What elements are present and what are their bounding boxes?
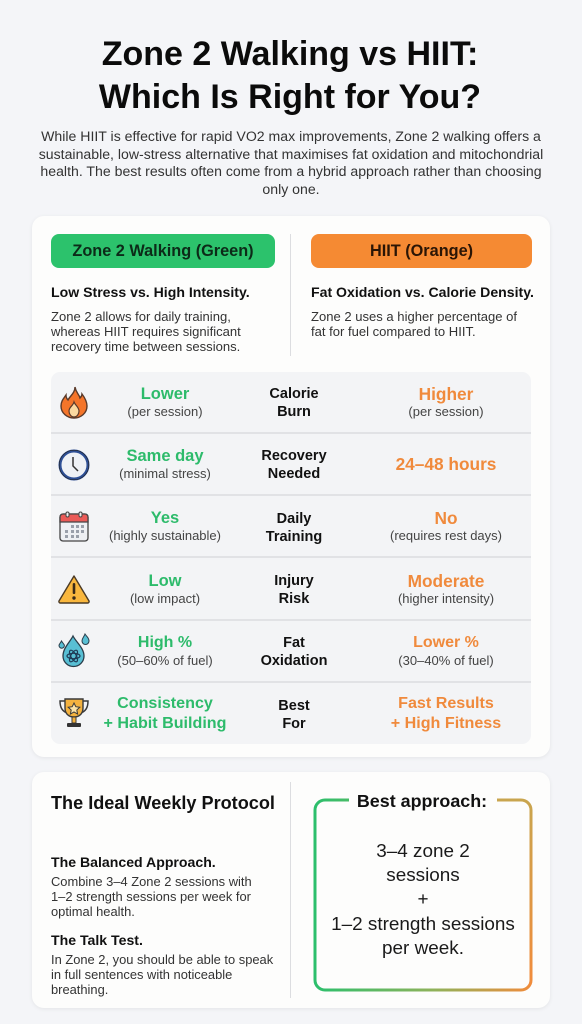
orange value: No (434, 508, 458, 528)
metric: Burn (277, 404, 311, 420)
orange value: + High Fitness (391, 714, 501, 732)
green note: (minimal stress) (119, 466, 211, 481)
icon: clock (58, 450, 90, 480)
green value: + Habit Building (104, 714, 226, 732)
orange value: Lower % (413, 634, 479, 651)
intro text: sustainable, low-stress alternative that maximises fat oxidation and mitochondrial (39, 146, 543, 162)
intro text: health. The best results often come from a hybrid approach rather than choosing (40, 163, 542, 179)
icon: flame (60, 386, 88, 419)
green note: (per session) (127, 404, 203, 419)
text: balanced approach: optimal health. (51, 904, 135, 919)
title (98, 35, 481, 116)
text: talk test: in full sentences with noticeable (51, 967, 232, 982)
orange note: (requires rest days) (390, 528, 502, 543)
metric: Training (266, 529, 322, 545)
orange value: Fast Results (398, 694, 494, 712)
row: injury risk (130, 571, 494, 607)
comparison table background (51, 372, 531, 744)
orange value (391, 694, 501, 732)
orange note: (per session) (408, 404, 484, 419)
orange value: Moderate (408, 571, 484, 591)
green note: (highly sustainable) (109, 528, 221, 543)
metric: Calorie (269, 386, 319, 402)
metric: Oxidation (261, 653, 327, 669)
icon: trophy (59, 698, 89, 727)
callout text: per week. (382, 938, 464, 959)
green value (104, 694, 226, 732)
icon: calendar (59, 512, 89, 542)
text: low stress: Zone 2 allows for daily training, (51, 309, 231, 324)
intro text (39, 128, 543, 197)
callout text: sessions (386, 865, 460, 886)
orange note: (higher intensity) (398, 591, 494, 606)
metric (278, 698, 310, 732)
text: low stress: recovery time between sessions. (51, 339, 240, 354)
divider (290, 782, 291, 998)
metric: Fat (283, 635, 305, 651)
callout text: 1–2 strength sessions (331, 914, 515, 935)
text: low stress (51, 309, 241, 354)
badge: Zone 2 Walking (51, 234, 275, 268)
metric: For (282, 716, 306, 732)
panel: weekly protocol (32, 772, 550, 1008)
metric (266, 511, 322, 545)
green note: (low impact) (130, 591, 200, 606)
text: fat oxidation (311, 309, 517, 339)
callout frame: best approach (314, 798, 532, 992)
green value: Lower (141, 385, 189, 403)
panel: comparison (32, 216, 550, 757)
green value: Yes (151, 509, 179, 527)
text: talk test: In Zone 2, you should be able to speak (51, 952, 273, 967)
badge: HIIT (311, 234, 532, 268)
text: low stress: whereas HIIT requires significant (51, 324, 241, 339)
heading: fat oxidation: Fat Oxidation vs. Calorie Density. (311, 284, 534, 300)
metric: Needed (268, 466, 320, 482)
orange note: (30–40% of fuel) (398, 653, 494, 668)
green note: (50–60% of fuel) (117, 653, 213, 668)
metric (269, 386, 319, 420)
text: balanced approach: 1–2 strength sessions per week for (51, 889, 251, 904)
green value: High % (138, 634, 192, 651)
callout text: + (417, 889, 429, 910)
metric (261, 635, 327, 669)
heading: talk test: The Talk Test. (51, 932, 143, 948)
green value: Consistency (117, 694, 213, 712)
metric: Daily (277, 511, 311, 527)
green value: Low (148, 572, 182, 590)
text: talk test (51, 952, 274, 997)
row: best for (104, 694, 501, 732)
metric: Recovery (261, 448, 327, 464)
text: fat oxidation: fat for fuel compared to HIIT. (311, 324, 476, 339)
heading: low stress: Low Stress vs. High Intensity. (51, 284, 250, 300)
icon: water drop with atom (58, 633, 90, 668)
callout heading: Best approach: (357, 791, 487, 811)
text: balanced approach: Combine 3–4 Zone 2 sessions with (51, 874, 252, 889)
metric: Best (278, 698, 310, 714)
metric (261, 448, 327, 482)
heading: The Ideal Weekly Protocol (51, 793, 275, 813)
icon: warning (58, 575, 90, 604)
metric (274, 573, 314, 607)
title: Which Is Right for You? (99, 78, 481, 116)
callout text: 3–4 zone 2 (376, 841, 470, 862)
green value: Same day (126, 447, 204, 465)
badge: Zone 2 Walking: Zone 2 Walking (Green) (72, 242, 254, 260)
metric: Risk (279, 591, 309, 607)
text: fat oxidation: Zone 2 uses a higher percentage of (311, 309, 517, 324)
badge: HIIT: HIIT (Orange) (370, 242, 473, 260)
heading: balanced approach: The Balanced Approach. (51, 854, 216, 870)
text: talk test: breathing. (51, 982, 108, 997)
row: calorie burn (127, 384, 484, 420)
intro text: While HIIT is effective for rapid VO2 max improvements, Zone 2 walking offers a (41, 128, 541, 144)
orange value: Higher (419, 384, 473, 404)
title: Zone 2 Walking vs HIIT: (102, 35, 478, 73)
orange value: 24–48 hours (396, 454, 496, 474)
row: recovery needed (119, 447, 496, 482)
metric: Injury (274, 573, 314, 589)
text: balanced approach (51, 874, 252, 919)
row: fat oxidation (117, 634, 494, 669)
intro text: only one. (262, 181, 320, 197)
callout text (331, 841, 515, 959)
row: daily training (109, 508, 502, 545)
divider (290, 234, 291, 356)
